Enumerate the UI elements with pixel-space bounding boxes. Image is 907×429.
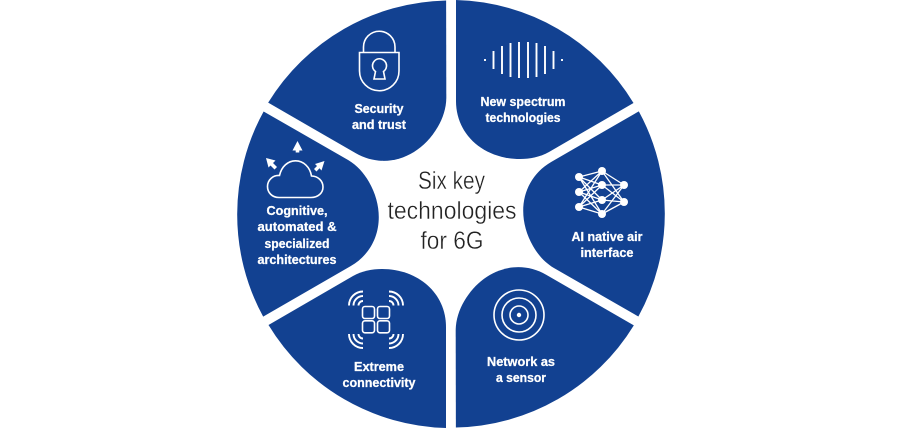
title: for 6G — [420, 227, 484, 255]
label: cognitive, automated and specialized architectures: architectures — [258, 253, 337, 267]
label: cognitive, automated and specialized architectures: automated & — [258, 220, 336, 234]
label: network as a sensor: a sensor — [496, 371, 546, 385]
panel: extreme connectivity — [268, 269, 446, 428]
panel: AI native air interface — [523, 111, 665, 317]
panel: network as a sensor — [456, 267, 634, 428]
title: technologies — [388, 197, 516, 225]
icon: connected squares with signal arcs — [349, 292, 403, 348]
panel: security and trust — [268, 0, 446, 161]
icon: spectrum wave — [485, 42, 562, 78]
panel: new spectrum technologies — [456, 0, 634, 159]
label: security and trust: and trust — [352, 118, 407, 132]
label: extreme connectivity: connectivity — [342, 376, 416, 390]
panel: cognitive, automated and specialized architectures — [237, 111, 379, 317]
icon: concentric sensor rings — [494, 290, 544, 340]
label: network as a sensor: Network as — [487, 355, 555, 369]
label: cognitive, automated and specialized architectures: Cognitive, — [266, 204, 328, 218]
label: cognitive, automated and specialized architectures: specialized — [264, 237, 330, 251]
label: new spectrum technologies: technologies — [486, 111, 561, 125]
label: new spectrum technologies: New spectrum — [480, 95, 566, 109]
label: AI native air interface: interface — [580, 246, 634, 260]
label: extreme connectivity: Extreme — [354, 360, 404, 374]
label: security and trust: Security — [354, 102, 404, 116]
title: Six key — [418, 167, 485, 195]
icon: padlock — [360, 31, 399, 91]
label: AI native air interface: AI native air — [572, 230, 643, 244]
icon: neural network — [575, 167, 628, 218]
icon: cloud with arrows — [266, 141, 324, 198]
